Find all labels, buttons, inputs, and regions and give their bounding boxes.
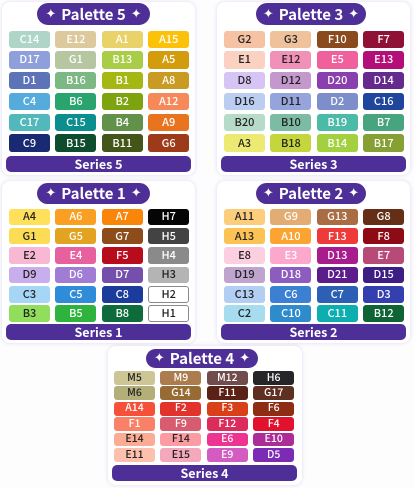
swatch grid: palette 5: D17	[19, 51, 40, 67]
footer: series 2: Series 2	[290, 322, 337, 341]
swatch grid: palette 5: B13	[112, 51, 132, 67]
panel: palette 2	[217, 181, 410, 343]
swatch grid: palette 5: C17	[20, 114, 39, 130]
swatch grid: palette 4: F9	[175, 416, 187, 431]
swatch grid: palette 4: D5	[267, 447, 280, 462]
swatch grid: palette 5: A12	[159, 93, 178, 109]
swatch grid: palette 1: D6	[69, 266, 83, 282]
swatch grid: palette 3: D2	[330, 93, 344, 109]
heading: palette 4	[146, 349, 258, 368]
swatch grid: palette 2: B12	[374, 305, 394, 321]
swatch grid: palette 4: F12	[218, 416, 236, 431]
heading: palette 5: ✦	[131, 6, 142, 22]
footer: series 5	[6, 156, 191, 172]
heading: palette 1: ✦	[45, 186, 56, 201]
swatch grid: palette 1: H4	[161, 247, 176, 263]
swatch grid: palette 1: C5	[69, 286, 83, 302]
swatch grid: palette 3: E5	[331, 51, 344, 67]
swatch grid: palette 4: H6	[267, 370, 281, 385]
swatch grid: palette 3: F10	[328, 31, 347, 47]
swatch grid: palette 2: F13	[328, 228, 347, 244]
swatch grid: palette 5: E12	[66, 31, 85, 47]
heading: palette 3: ✦	[348, 6, 359, 22]
footer: series 3: Series 3	[290, 154, 337, 173]
heading: palette 3	[256, 3, 366, 25]
swatch grid: palette 4: E15	[172, 447, 190, 462]
heading: palette 2: ✦	[263, 186, 274, 201]
swatch grid: palette 1: E4	[69, 247, 82, 263]
swatch grid: palette 1: E2	[23, 247, 36, 263]
swatch grid: palette 1: H2	[161, 286, 176, 302]
footer: series 1: Series 1	[74, 322, 122, 341]
panel: palette 4	[108, 346, 302, 485]
swatch grid: palette 5: A9	[162, 114, 175, 130]
swatch grid: palette 5: G6	[162, 135, 176, 151]
swatch grid: palette 2: C6	[284, 286, 298, 302]
panel: palette 1	[2, 181, 195, 343]
swatch grid: palette 1: H1	[161, 305, 176, 321]
panel: palette 3	[217, 2, 410, 175]
swatch grid: palette 5: B15	[66, 135, 86, 151]
swatch grid: palette 4: F4	[268, 416, 280, 431]
heading: palette 2	[256, 183, 366, 204]
footer: series 1	[6, 324, 191, 340]
swatch grid: palette 1: F5	[116, 247, 129, 263]
heading: palette 4: ✦	[239, 351, 250, 366]
swatch grid: palette 1: G7	[115, 228, 129, 244]
swatch grid: palette 1: D9	[23, 266, 36, 282]
swatch grid: palette 1: C8	[116, 286, 129, 302]
swatch grid: palette 2: G9	[284, 208, 298, 224]
swatch grid: palette 3: D20	[327, 72, 347, 88]
swatch grid: palette 3: D11	[281, 93, 301, 109]
swatch grid: palette 5: B16	[66, 72, 86, 88]
swatch grid: palette 4: A14	[125, 400, 144, 415]
heading: palette 5: ✦	[45, 6, 56, 22]
swatch grid: palette 4: E9	[221, 447, 233, 462]
swatch grid: palette 5: G1	[69, 51, 83, 67]
swatch grid: palette 1: G5	[69, 228, 83, 244]
heading: palette 1: ✦	[131, 186, 142, 201]
swatch grid: palette 3: D16	[234, 93, 255, 109]
swatch grid: palette 3: B20	[235, 114, 254, 130]
heading: palette 3: Palette 3	[279, 4, 343, 24]
swatch grid: palette 3: G3	[284, 31, 298, 47]
swatch grid: palette 3: E12	[281, 51, 300, 67]
swatch grid: palette 1: A6	[69, 208, 82, 224]
swatch grid: palette 5: C15	[66, 114, 86, 130]
swatch grid: palette 2: C10	[281, 305, 301, 321]
swatch grid: palette 2: G13	[327, 208, 347, 224]
footer: series 2	[221, 324, 406, 340]
swatch grid: palette 5: B4	[115, 114, 129, 130]
heading: palette 1: Palette 1	[61, 183, 126, 204]
swatch grid: palette 3: F7	[377, 31, 390, 47]
swatch grid: palette 4: G17	[264, 385, 283, 400]
swatch grid: palette 1: H5	[161, 228, 176, 244]
swatch grid: palette 3: E13	[374, 51, 393, 67]
swatch grid: palette 3: E1	[238, 51, 251, 67]
heading: palette 5: Palette 5	[61, 4, 126, 24]
swatch grid: palette 5: A15	[159, 31, 178, 47]
swatch grid: palette 2: D19	[234, 266, 255, 282]
swatch grid: palette 4: E6	[221, 431, 233, 446]
swatch grid: palette 1: H7	[161, 208, 176, 224]
swatch grid: palette 3: B14	[327, 135, 347, 151]
swatch grid: palette 5: A5	[162, 51, 175, 67]
heading: palette 2: Palette 2	[279, 183, 343, 204]
swatch grid: palette 2: C7	[331, 286, 344, 302]
swatch grid: palette 5: A1	[116, 31, 129, 47]
heading: palette 3: ✦	[263, 6, 274, 22]
footer: series 4	[112, 465, 297, 481]
swatch grid: palette 1: H3	[161, 266, 176, 282]
swatch grid: palette 2: A10	[281, 228, 301, 244]
swatch grid: palette 5: B6	[69, 93, 83, 109]
swatch grid: palette 2: E3	[284, 247, 297, 263]
swatch grid: palette 4: E10	[265, 431, 283, 446]
swatch grid: palette 4: F11	[218, 385, 236, 400]
swatch grid: palette 4: F1	[129, 416, 140, 431]
swatch grid: palette 2: F8	[377, 228, 390, 244]
swatch grid: palette 2: D15	[374, 266, 394, 282]
swatch grid: palette 2: A11	[235, 208, 254, 224]
heading: palette 1	[37, 183, 150, 204]
swatch grid: palette 2: E7	[377, 247, 390, 263]
swatch grid: palette 4: M5	[127, 370, 142, 385]
swatch grid: palette 3: D14	[374, 72, 394, 88]
heading: palette 5	[37, 3, 150, 25]
swatch grid: palette 3: G2	[238, 31, 251, 47]
swatch grid: palette 5: D1	[23, 72, 36, 88]
swatch grid: palette 3: C16	[374, 93, 394, 109]
swatch grid: palette 1: B8	[115, 305, 129, 321]
swatch grid: palette 3: B17	[374, 135, 394, 151]
swatch grid: palette 1: B3	[23, 305, 36, 321]
swatch grid: palette 4	[114, 370, 294, 462]
swatch grid: palette 2: C13	[235, 286, 254, 302]
panel: palette 5	[2, 2, 195, 175]
swatch grid: palette 2: C11	[327, 305, 347, 321]
footer: series 5: Series 5	[74, 154, 122, 173]
heading: palette 2: ✦	[348, 186, 359, 201]
swatch grid: palette 5: A8	[162, 72, 175, 88]
swatch grid: palette 2: D21	[327, 266, 347, 282]
swatch grid: palette 2: G8	[377, 208, 391, 224]
swatch grid: palette 5: C4	[23, 93, 36, 109]
footer: series 3	[221, 156, 406, 172]
swatch grid: palette 1	[9, 208, 189, 322]
swatch grid: palette 1: D7	[115, 266, 129, 282]
swatch grid: palette 2	[224, 208, 404, 322]
swatch grid: palette 1: C3	[23, 286, 36, 302]
swatch grid: palette 5	[9, 31, 189, 152]
swatch grid: palette 3: D12	[281, 72, 301, 88]
swatch grid: palette 2: D3	[377, 286, 391, 302]
footer: series 4: Series 4	[180, 463, 228, 482]
swatch grid: palette 4: M9	[174, 370, 188, 385]
swatch grid: palette 1: A4	[23, 208, 36, 224]
swatch grid: palette 3: B18	[281, 135, 301, 151]
swatch grid: palette 4: F3	[221, 400, 233, 415]
swatch grid: palette 2: A13	[235, 228, 254, 244]
swatch grid: palette 5: B2	[115, 93, 129, 109]
heading: palette 4: Palette 4	[170, 348, 234, 369]
swatch grid: palette 4: E11	[125, 447, 144, 462]
swatch grid: palette 1: G1	[22, 228, 36, 244]
swatch grid: palette 2: D13	[327, 247, 347, 263]
swatch grid: palette 3: D8	[238, 72, 251, 88]
swatch grid: palette 2: C2	[238, 305, 251, 321]
swatch grid: palette 3: B10	[281, 114, 301, 130]
swatch grid: palette 2: E8	[238, 247, 251, 263]
swatch grid: palette 4: E14	[125, 431, 144, 446]
swatch grid: palette 4: M12	[217, 370, 238, 385]
swatch grid: palette 3	[224, 31, 404, 152]
swatch grid: palette 3: B7	[377, 114, 390, 130]
swatch grid: palette 5: C9	[23, 135, 36, 151]
swatch grid: palette 4: F6	[268, 400, 280, 415]
swatch grid: palette 3: A3	[238, 135, 251, 151]
swatch grid: palette 1: A7	[116, 208, 129, 224]
swatch grid: palette 4: F2	[175, 400, 187, 415]
swatch grid: palette 4: G14	[171, 385, 191, 400]
swatch grid: palette 4: M6	[127, 385, 142, 400]
swatch grid: palette 5: C14	[20, 31, 39, 47]
swatch grid: palette 5: B11	[112, 135, 132, 151]
swatch grid: palette 2: D18	[281, 266, 301, 282]
swatch grid: palette 1: B5	[69, 305, 83, 321]
swatch grid: palette 5: B1	[115, 72, 129, 88]
heading: palette 4: ✦	[154, 351, 165, 366]
swatch grid: palette 4: F14	[172, 431, 190, 446]
swatch grid: palette 3: B19	[327, 114, 347, 130]
